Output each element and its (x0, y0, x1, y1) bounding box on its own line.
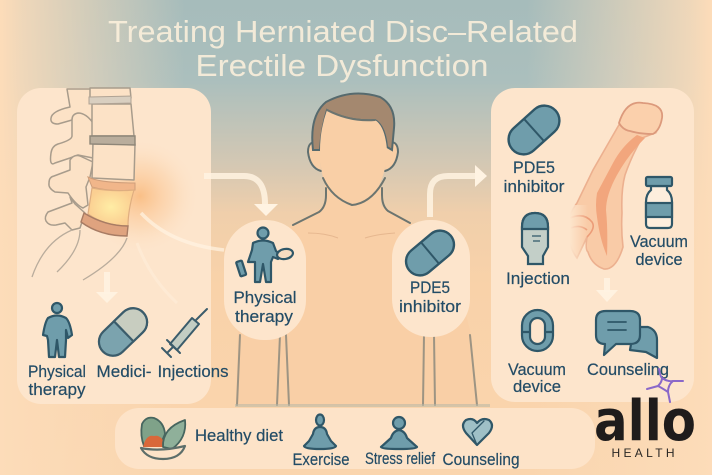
icon: exercise pose (304, 414, 336, 449)
central man figure (236, 93, 478, 405)
title: Treating Herniated Disc–Related (108, 14, 578, 49)
label: Injections (158, 362, 228, 381)
label: Exercise (292, 450, 350, 469)
wordmark: allo (594, 389, 696, 454)
label: Healthy diet (195, 426, 283, 445)
label: Vacuum (508, 360, 566, 379)
icon: vacuum ring (522, 310, 553, 351)
icon: medicine bottle (646, 177, 672, 228)
label: Counseling (587, 360, 669, 379)
arrow: spine to therapy (204, 176, 278, 216)
logo: allo health (594, 369, 696, 460)
icon: injection vial (522, 213, 548, 264)
panel: lifestyle (115, 408, 595, 469)
panel: spine (17, 88, 228, 404)
divider (235, 404, 490, 407)
icon: pill (400, 225, 460, 281)
title: Erectile Dysfunction (196, 48, 488, 83)
arrow: down to counseling (596, 278, 618, 302)
arm lines (237, 335, 477, 405)
panel: PDE5 inhibitor (392, 220, 470, 337)
vertebrae (90, 88, 131, 98)
icon: purple network (647, 369, 683, 402)
icon: capsule (93, 302, 153, 362)
pain glow (80, 138, 200, 254)
label: inhibitor (504, 177, 565, 196)
panel: ED treatments (491, 88, 694, 402)
label: device (513, 377, 561, 396)
label: inhibitor (399, 297, 461, 316)
label: Physical (28, 362, 86, 381)
icon: pill (502, 99, 566, 161)
label: Vacuum (630, 232, 688, 251)
icon: stress relief pose (381, 417, 417, 449)
title (108, 14, 578, 83)
sacrum (32, 230, 127, 280)
icon: heart (463, 419, 492, 445)
label: therapy (28, 380, 86, 399)
icon: speech bubbles (596, 311, 657, 358)
label: therapy (235, 307, 294, 326)
panel: physical therapy (224, 220, 306, 340)
spinous processes (51, 89, 94, 124)
arrow: spine down (96, 272, 118, 303)
wordmark subtitle: HEALTH (612, 446, 674, 460)
neck and shoulders (293, 188, 410, 225)
label: PDE5 (410, 278, 450, 297)
icon: salad bowl (141, 418, 185, 459)
icon: therapist (236, 228, 294, 282)
icon: syringe (162, 309, 207, 357)
icon: person (43, 303, 72, 357)
face (320, 110, 387, 205)
ears (308, 142, 398, 171)
label: Counseling (442, 450, 520, 469)
discs (89, 96, 131, 104)
label: Medici- (96, 362, 152, 381)
hair (312, 93, 394, 150)
illustration: anatomy (562, 103, 662, 269)
collar bones (308, 233, 395, 238)
label: Stress relief (365, 449, 435, 468)
label: PDE5 (513, 158, 555, 177)
label: Injection (506, 269, 570, 288)
label: device (636, 250, 682, 269)
nerve and flow arrows (141, 213, 224, 250)
label: Physical (234, 288, 296, 307)
arrow: to treatment panel (430, 165, 487, 217)
